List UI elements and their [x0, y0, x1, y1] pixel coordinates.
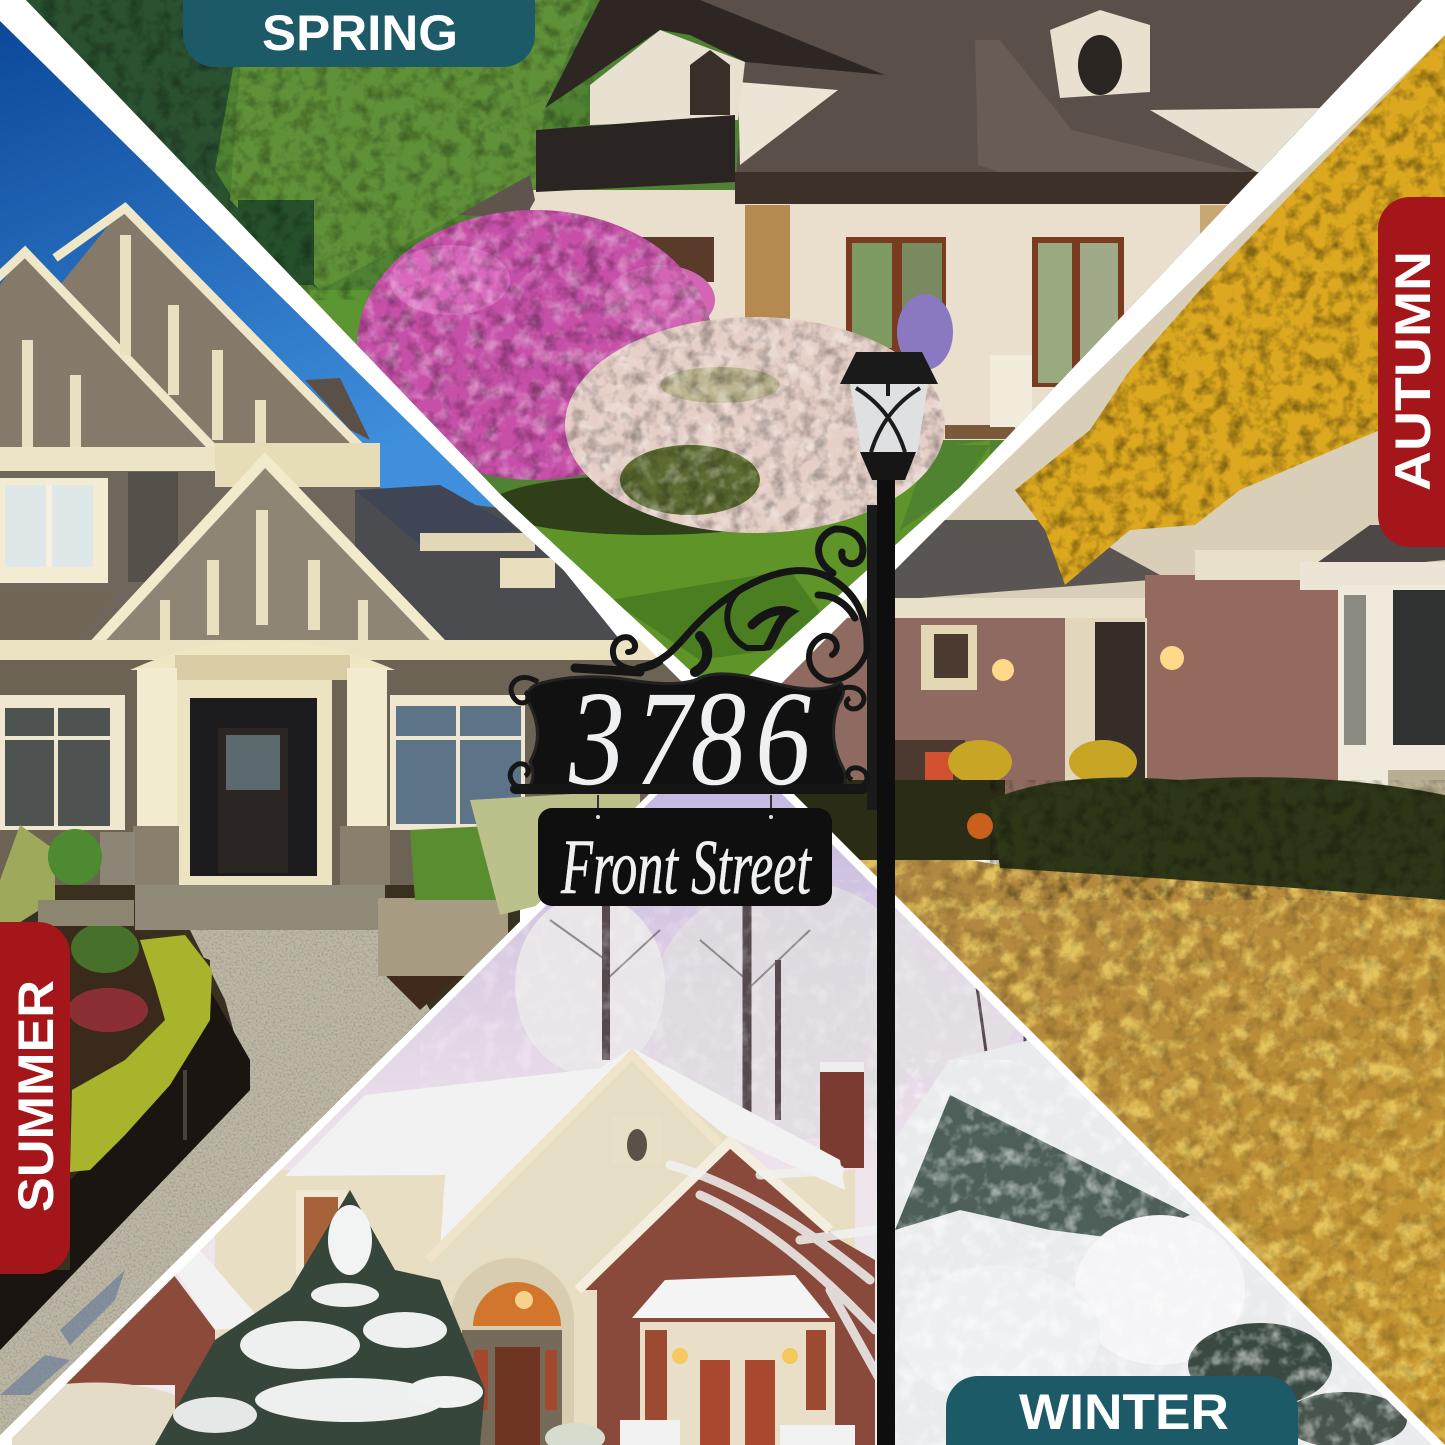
label: summer: SUMMER — [8, 980, 64, 1212]
house winter — [0, 1048, 875, 1445]
yellow tree — [1000, 20, 1445, 600]
forest background — [0, 0, 1445, 560]
label: spring — [183, 0, 535, 67]
roof — [700, 0, 1422, 190]
leaf-covered lawn — [845, 845, 1445, 1445]
panel: summer — [0, 0, 720, 1445]
street plate — [538, 808, 832, 910]
walkway gravel — [0, 930, 440, 1445]
label: autumn: AUTUMN — [1385, 251, 1441, 491]
columns — [137, 668, 177, 828]
panel: winter — [12, 794, 1432, 1445]
front gable — [106, 468, 430, 640]
house number: 3786 — [568, 663, 811, 814]
house autumn — [782, 35, 1445, 860]
solar lamp — [840, 352, 938, 480]
number plate — [510, 663, 868, 814]
panel: spring — [0, 0, 1445, 720]
pole — [877, 478, 895, 1445]
flowering bushes — [350, 205, 950, 535]
hedges — [780, 777, 1445, 900]
label: spring: SPRING — [262, 5, 458, 61]
address sign post — [510, 352, 938, 1445]
house spring — [458, 0, 1445, 440]
grounds — [0, 885, 520, 1445]
bracket back plate — [867, 505, 877, 810]
street name: Front Street — [560, 823, 813, 910]
windows — [846, 237, 946, 352]
door — [190, 698, 317, 876]
sky — [0, 0, 520, 520]
bark bed — [0, 990, 250, 1350]
snowy pine — [155, 1190, 485, 1445]
hangers — [598, 795, 771, 812]
windows — [0, 695, 125, 830]
hedges — [70, 935, 212, 1172]
winter sky and trees — [135, 794, 1098, 1395]
balcony — [536, 115, 735, 192]
frosted branches — [670, 1165, 880, 1380]
label: autumn — [1378, 197, 1445, 547]
panel: autumn — [782, 35, 1445, 1445]
scrollwork bracket — [575, 529, 867, 681]
label: summer — [0, 922, 70, 1274]
bush texture — [350, 205, 950, 535]
roofs — [0, 590, 118, 638]
upper gable — [545, 0, 885, 108]
label: winter — [946, 1376, 1298, 1445]
label: winter: WINTER — [1019, 1384, 1229, 1440]
snowy trees at right — [895, 1040, 1407, 1445]
house summer — [0, 205, 720, 1445]
lawn — [515, 440, 990, 678]
